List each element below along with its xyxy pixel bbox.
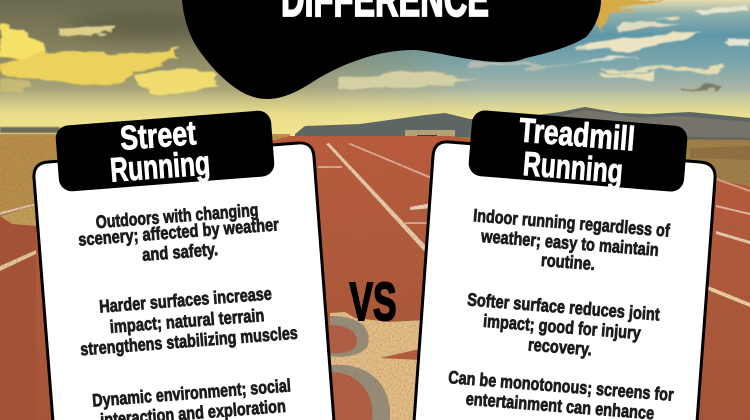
heading: street running: Running bbox=[109, 144, 211, 190]
heading: treadmill running: Treadmill bbox=[518, 111, 636, 159]
heading: street running: Street bbox=[119, 114, 197, 158]
text: treadmill running point 3 bbox=[448, 367, 674, 420]
panel: treadmill running bbox=[414, 109, 715, 420]
text: treadmill running point 1: Indoor running regardless of bbox=[473, 205, 671, 241]
background: horizon glow bbox=[0, 88, 750, 138]
text: street running point 2: strengthens stabilizing muscles bbox=[80, 323, 298, 359]
background: desert sky bbox=[0, 0, 750, 140]
vs label: VS bbox=[350, 272, 396, 332]
text: street running point 2: impact; natural terrain bbox=[109, 305, 265, 337]
heading: street running bbox=[55, 110, 275, 192]
text: treadmill running point 1: routine. bbox=[540, 250, 596, 274]
title blob bbox=[182, 0, 601, 99]
text: street running point 1: and safety. bbox=[141, 239, 219, 265]
text: street running point 3: Dynamic environment; social bbox=[92, 375, 291, 411]
text: treadmill running point 2: recovery. bbox=[527, 335, 593, 359]
heading: treadmill running bbox=[468, 109, 688, 193]
panel: street running bbox=[34, 110, 334, 420]
text: street running point 1: scenery; affected by weather bbox=[78, 214, 279, 250]
background: track grain bbox=[0, 136, 750, 420]
background: mountains and field bbox=[0, 107, 750, 216]
background: painted lane number bbox=[330, 312, 424, 420]
text: street running point 1: Outdoors with changing bbox=[95, 200, 259, 232]
text: street running point 3 bbox=[92, 375, 291, 420]
text: treadmill running point 3: Can be monotonous; screens for bbox=[448, 367, 674, 405]
text: street running point 2: Harder surfaces increase bbox=[98, 283, 273, 317]
background: running track bbox=[0, 136, 750, 420]
heading: treadmill running: Running bbox=[522, 145, 624, 191]
card: street running bbox=[34, 143, 334, 420]
text: treadmill running point 2: impact; good for injury bbox=[482, 311, 642, 343]
text: treadmill running point 1 bbox=[473, 205, 671, 274]
text: treadmill running point 2: Softer surface reduces joint bbox=[467, 289, 660, 325]
text: treadmill running point 1: weather; easy to maintain bbox=[480, 226, 660, 260]
text: street running point 1 bbox=[78, 200, 279, 265]
card: treadmill running bbox=[414, 142, 715, 420]
text: treadmill running point 2 bbox=[467, 289, 660, 359]
text: street running point 2 bbox=[80, 283, 298, 359]
